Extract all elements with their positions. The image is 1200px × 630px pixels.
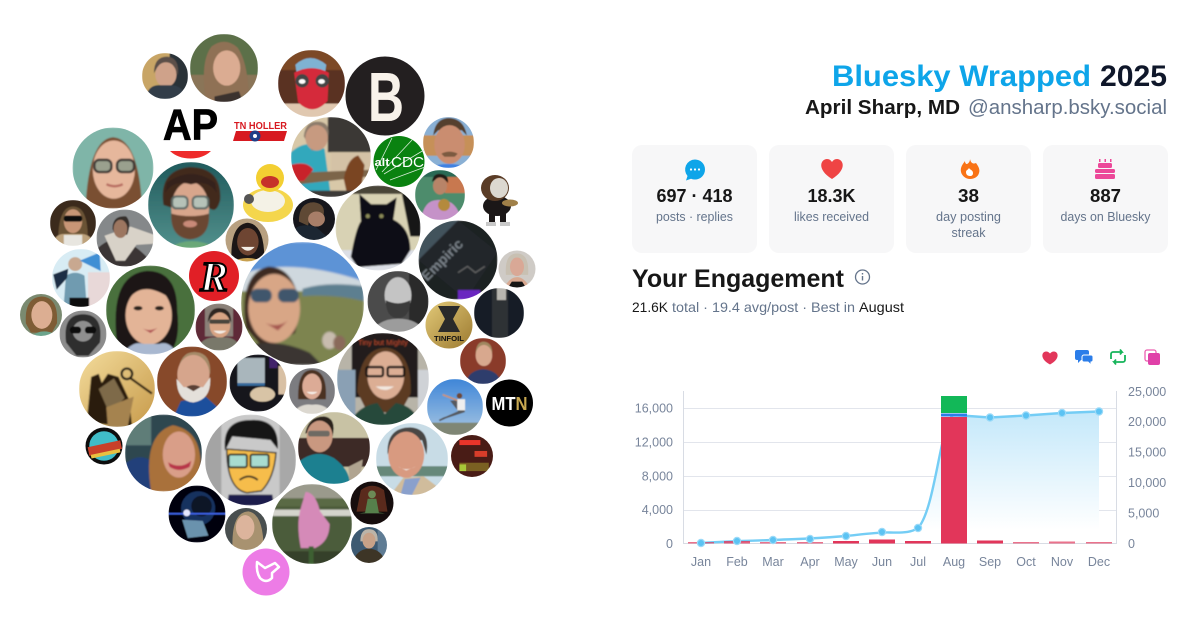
avatar: woman in profile with dark coat (293, 198, 335, 240)
avatar: woman with glasses on teal (72, 128, 154, 208)
avatar: man in suit (376, 423, 448, 495)
avatar: man with sunglasses (50, 200, 96, 246)
month labels: Dec (1088, 555, 1110, 569)
stat value: 697 · 418 (656, 185, 732, 206)
avatar: woman with short hair (142, 53, 188, 99)
avatar: man jumping against the sky (427, 379, 483, 435)
left axis labels (635, 402, 673, 551)
avatar: smiling woman with curly hair (125, 414, 202, 492)
stat label: day posting (936, 210, 1001, 224)
cumulative line (701, 412, 1099, 543)
month labels: Aug (943, 555, 965, 569)
stat value: 18.3K (808, 185, 856, 206)
stat value: 38 (958, 185, 979, 206)
avatar: neon signs (451, 435, 493, 477)
avatar: black and white man (368, 271, 428, 332)
month labels: Jan (691, 555, 711, 569)
profile name and handle: April Sharp, MD (805, 97, 960, 119)
avatar: TN Holler logo (233, 121, 288, 142)
icon: quotes legend (1145, 350, 1160, 365)
avatar: MTN logo: MTN (492, 394, 528, 414)
avatar: bearded illustrated man (60, 310, 106, 358)
avatar: green skeleton (350, 482, 394, 524)
stat label: posts · replies (656, 210, 733, 224)
avatar: AP logo: AP (163, 100, 218, 150)
month labels: Oct (1016, 555, 1036, 569)
panel: days on Bluesky (1043, 145, 1168, 253)
right axis labels: 25,000 (1128, 385, 1166, 399)
avatar: gloved hand with magnifier (79, 351, 155, 427)
profile name and handle: @ansharp.bsky.social (968, 97, 1167, 119)
icon: info (856, 270, 870, 284)
profile name and handle (805, 97, 1167, 119)
avatar: dark room with computer (230, 354, 286, 412)
month labels: Nov (1051, 555, 1074, 569)
avatar: grumpy cartoon with glasses (205, 414, 296, 506)
grid lines (684, 408, 1116, 510)
avatar: smiling woman with braids (226, 218, 268, 262)
month labels: Mar (762, 555, 784, 569)
icon: likes legend (1042, 352, 1058, 364)
month labels: Apr (800, 555, 820, 569)
stat label: streak (952, 226, 986, 240)
avatar: young woman headshot (289, 368, 335, 414)
icon: reposts legend (1111, 350, 1125, 364)
avatar: Deadpool mask (278, 50, 345, 117)
stacked monthly bars (688, 396, 1112, 544)
icon: birthday cake (1095, 159, 1115, 179)
avatar: altCDC logo: CDC (391, 154, 424, 171)
engagement summary: August (859, 299, 904, 315)
month labels: Jul (910, 555, 926, 569)
avatar: main selfie with sunglasses (241, 242, 364, 365)
left axis labels: 12,000 (635, 436, 673, 450)
avatar: foxglove flower garden (272, 484, 352, 564)
avatar: R logo: R (199, 255, 228, 301)
engagement summary: 21.6K (632, 299, 669, 315)
avatar: rubber duck doctor (243, 164, 293, 222)
stat label: days on Bluesky (1060, 210, 1151, 224)
avatar: Tinfoil badge (426, 302, 472, 348)
avatar: man with glasses smiling (196, 304, 242, 350)
avatar: x-ray brain (168, 486, 226, 542)
avatar: man with white beard (157, 346, 227, 416)
chart: monthly engagement (635, 385, 1166, 569)
avatar: woman seen from dark background (474, 288, 524, 338)
stat label: likes received (794, 210, 869, 224)
avatar: curly-haired man (148, 162, 234, 248)
month labels: May (834, 555, 859, 569)
avatar: woman with dark hair on green (106, 266, 195, 354)
left axis labels: 0 (666, 537, 673, 551)
month labels: Sep (979, 555, 1001, 569)
icon: replies legend (1075, 350, 1093, 365)
avatar: B logo (346, 56, 424, 136)
avatar: older woman portrait (351, 527, 387, 563)
title: Bluesky Wrapped (832, 60, 1091, 93)
icon: flame (961, 159, 979, 179)
line data points (697, 408, 1103, 547)
avatar: woman with long hair (190, 34, 258, 102)
left axis labels: 8,000 (642, 470, 673, 484)
left axis labels: 16,000 (635, 402, 673, 416)
avatar: altCDC logo (374, 136, 425, 187)
avatar: pink shaka badge (242, 548, 290, 596)
avatar: man eating coconut (415, 170, 465, 220)
avatar: man in teal shirt on couch (298, 412, 370, 484)
avatar: blonde woman in tank top (498, 250, 536, 288)
avatar: cat figurine sticker (481, 175, 518, 226)
avatar: TN Holler logo: TN HOLLER (234, 121, 288, 132)
avatar: MTN logo (486, 380, 533, 426)
avatar: Tiny but Mighty woman (337, 333, 429, 425)
cumulative area (701, 412, 1099, 543)
right axis labels: 0 (1128, 537, 1135, 551)
chart axes (684, 391, 1116, 544)
avatar: R logo (189, 251, 239, 301)
avatar: altCDC logo: alt (374, 157, 390, 169)
chart legend (1042, 350, 1160, 365)
icon: chat bubble (685, 160, 705, 180)
engagement summary (632, 299, 904, 315)
avatar: activist with megaphone (52, 249, 110, 307)
avatar: man on red wood wall (460, 338, 506, 384)
avatar: young woman with long hair (225, 508, 267, 550)
avatar: man with guitar and dachshund (291, 117, 371, 197)
right axis labels (1128, 385, 1166, 551)
avatar: blonde woman with short hair (20, 294, 62, 336)
right axis labels: 10,000 (1128, 476, 1166, 490)
month labels (691, 555, 1110, 569)
left axis labels: 4,000 (642, 503, 673, 517)
avatar: B logo: B (368, 58, 404, 136)
avatar: roller coaster badge (86, 428, 122, 464)
panel: likes received (769, 145, 894, 253)
right axis labels: 15,000 (1128, 446, 1166, 460)
month labels: Jun (872, 555, 892, 569)
stat label (936, 210, 1001, 240)
avatar: Tinfoil badge: TINFOIL (434, 334, 464, 343)
avatar: Empiric book: Empiric (419, 236, 467, 285)
avatar: man close-up (423, 117, 474, 168)
panel: day posting streak (906, 145, 1031, 253)
icon: heart (821, 159, 843, 179)
title: 2025 (1100, 60, 1167, 93)
right axis labels: 20,000 (1128, 415, 1166, 429)
month labels: Feb (726, 555, 748, 569)
right axis labels: 5,000 (1128, 506, 1159, 520)
avatar: Empiric book (418, 220, 498, 300)
heading: Your Engagement: Your Engagement (632, 265, 845, 293)
stat value: 887 (1090, 185, 1121, 206)
avatar: Tiny but Mighty woman: Tiny but Mighty (358, 338, 408, 347)
engagement summary: total · 19.4 avg/post · Best in (672, 299, 855, 315)
avatar: black cat (336, 186, 420, 270)
panel: posts and replies (632, 145, 757, 253)
avatar: dark reclining man (96, 210, 154, 266)
avatar cluster (20, 34, 536, 596)
